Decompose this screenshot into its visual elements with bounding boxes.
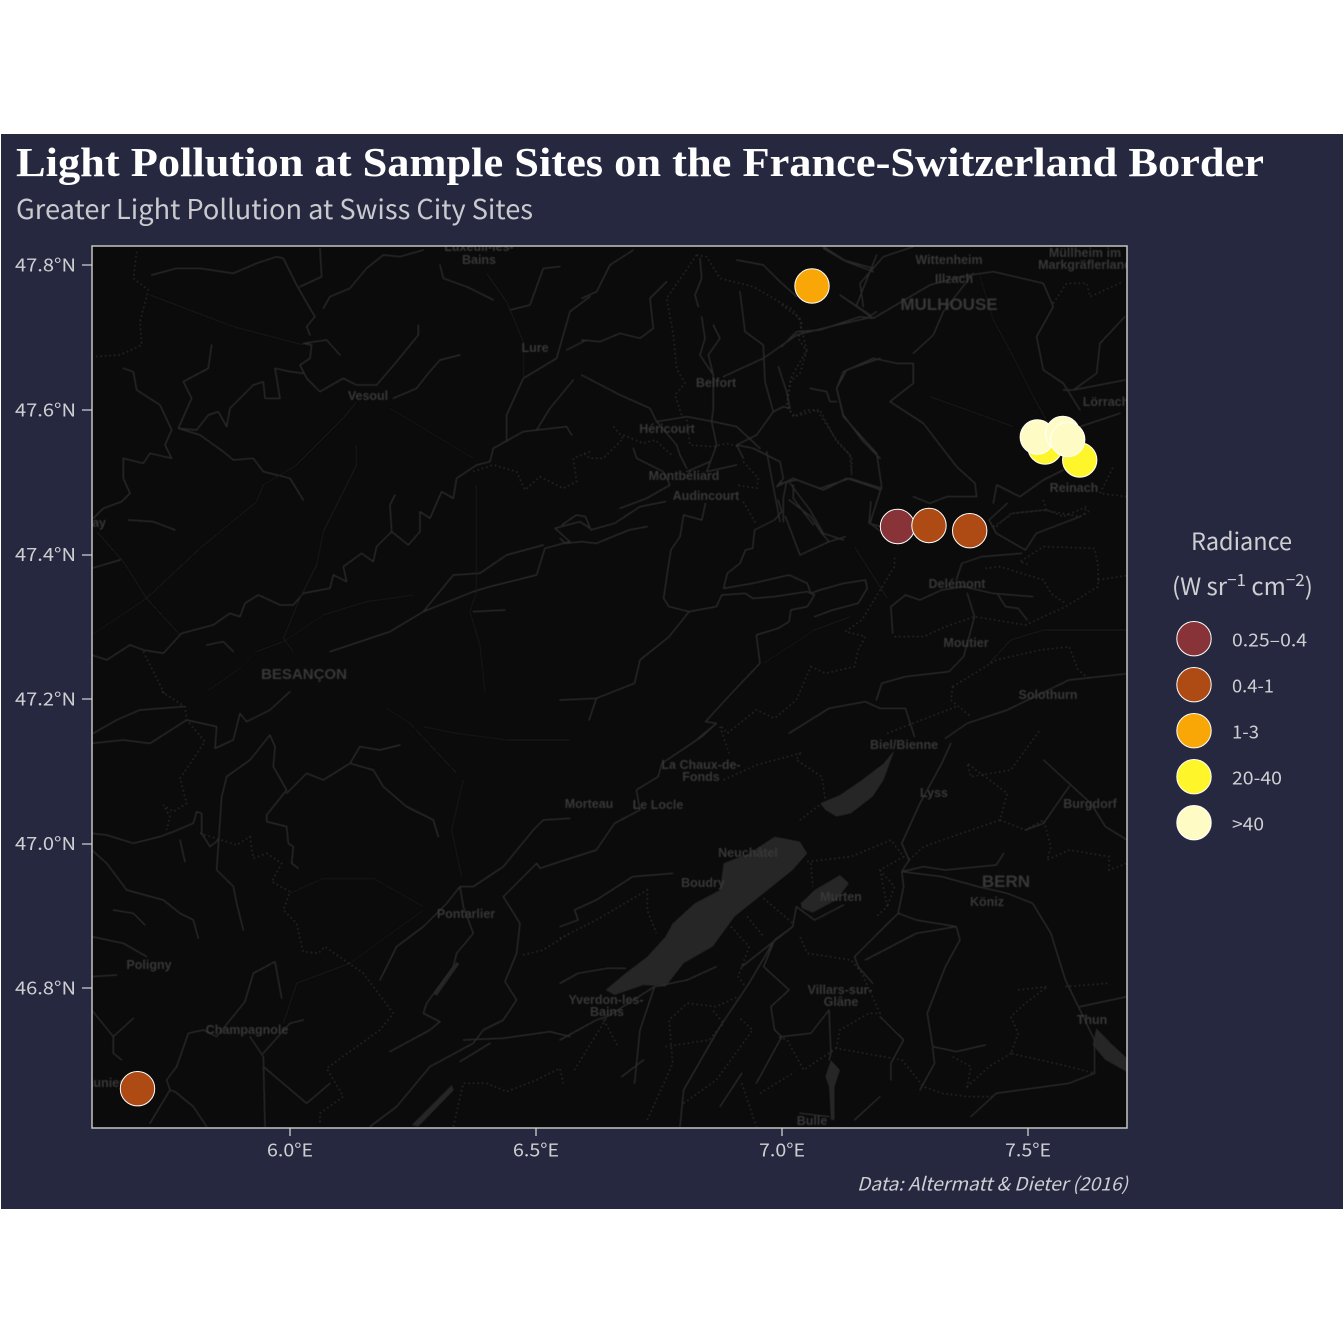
map panel <box>30 240 1132 1128</box>
basemap place names: Boudry <box>681 876 725 890</box>
legend item: 0.4-1: 0.4-1 <box>1232 672 1274 698</box>
legend title: −1 <box>1227 566 1246 591</box>
legend title: ) <box>1305 567 1313 602</box>
basemap place names: Belfort <box>696 376 737 390</box>
x axis <box>267 1128 1051 1162</box>
legend item: 1-3: 1-3 <box>1232 718 1259 744</box>
legend title <box>1172 522 1313 602</box>
basemap place names: Biel/Bienne <box>870 738 938 752</box>
subtitle: Greater Light Pollution at Swiss City Sites <box>16 188 533 227</box>
basemap place names: Villars-sur- <box>807 983 873 997</box>
basemap place names: Bulle <box>797 1114 827 1128</box>
basemap place names: La Chaux-de- <box>661 758 741 772</box>
basemap place names: Pontarlier <box>437 907 495 921</box>
basemap place names: Illzach <box>935 272 973 286</box>
basemap place names: BERN <box>982 872 1030 891</box>
basemap place names: Köniz <box>970 895 1004 909</box>
basemap place names: Müllheim im <box>1049 246 1121 260</box>
y axis: 47.4°N <box>15 541 76 567</box>
x axis: 7.0°E <box>759 1136 805 1162</box>
basemap place names: Audincourt <box>673 489 740 503</box>
legend item: >40 <box>1177 806 1264 840</box>
basemap place names: Bains <box>590 1005 624 1019</box>
basemap place names: Reinach <box>1050 481 1098 495</box>
basemap lakes <box>412 750 1129 1127</box>
y axis <box>15 252 92 1000</box>
basemap place names: Neuchâtel <box>718 846 778 860</box>
basemap place names: Gray <box>78 516 106 530</box>
legend title: cm <box>1246 567 1286 602</box>
basemap place names: Thun <box>1077 1013 1107 1027</box>
basemap place names: Héricourt <box>639 422 696 436</box>
basemap place names: Lörrach <box>1083 395 1129 409</box>
basemap place names <box>30 240 1132 1128</box>
basemap place names: BESANÇON <box>261 666 347 683</box>
y axis: 47.6°N <box>15 396 76 422</box>
x axis: 6.0°E <box>267 1136 313 1162</box>
basemap place names: Markgräflerland <box>1038 258 1132 272</box>
legend <box>1172 522 1313 840</box>
legend item: 1-3 <box>1177 714 1259 748</box>
sample site points <box>120 269 1097 1106</box>
basemap place names: Murten <box>820 890 862 904</box>
legend item: 0.25–0.4: 0.25–0.4 <box>1232 626 1307 652</box>
dark background band <box>1 134 1343 1209</box>
basemap place names: Morteau <box>565 797 613 811</box>
basemap place names: Montbéliard <box>649 469 719 483</box>
basemap place names: Le Locle <box>633 798 683 812</box>
legend item: 0.25–0.4 <box>1177 622 1307 656</box>
basemap place names: Poligny <box>126 958 172 972</box>
basemap place names: Burgdorf <box>1063 797 1118 811</box>
legend item: 0.4-1 <box>1177 668 1274 702</box>
basemap place names: MULHOUSE <box>900 295 998 314</box>
basemap place names: Champagnole <box>206 1023 288 1037</box>
basemap place names: Moutier <box>943 636 989 650</box>
basemap place names: Delémont <box>929 577 986 591</box>
basemap rivers and roads <box>92 247 1130 1127</box>
legend title: Radiance <box>1191 522 1292 557</box>
y axis: 46.8°N <box>15 974 76 1000</box>
basemap place names: Glâne <box>824 995 858 1009</box>
basemap place names: Lure <box>521 341 549 355</box>
basemap place names: Luxeuil-les- <box>444 240 514 254</box>
basemap place names: Wittenheim <box>915 253 983 267</box>
legend item: 20-40: 20-40 <box>1232 764 1282 790</box>
x axis: 7.5°E <box>1005 1136 1051 1162</box>
basemap place names: Vesoul <box>348 389 388 403</box>
legend title: (W sr <box>1172 567 1227 602</box>
basemap place names: Solothurn <box>1018 688 1078 702</box>
caption: Data: Altermatt & Dieter (2016) <box>857 1170 1129 1196</box>
y axis: 47.0°N <box>15 830 76 856</box>
x axis: 6.5°E <box>513 1136 559 1162</box>
y axis: 47.2°N <box>15 686 76 712</box>
basemap place names: Lons-le-Saunier <box>30 1076 124 1090</box>
legend item: 20-40 <box>1177 760 1282 794</box>
legend item: >40: >40 <box>1232 810 1264 836</box>
basemap place names: Lyss <box>920 786 948 800</box>
legend title: −2 <box>1286 566 1305 591</box>
basemap place names: Bains <box>462 253 496 267</box>
basemap place names: Yverdon-les- <box>568 993 644 1007</box>
title: Light Pollution at Sample Sites on the France-Switzerland Border <box>16 139 1264 185</box>
basemap place names: Fonds <box>682 770 720 784</box>
y axis: 47.8°N <box>15 252 76 278</box>
